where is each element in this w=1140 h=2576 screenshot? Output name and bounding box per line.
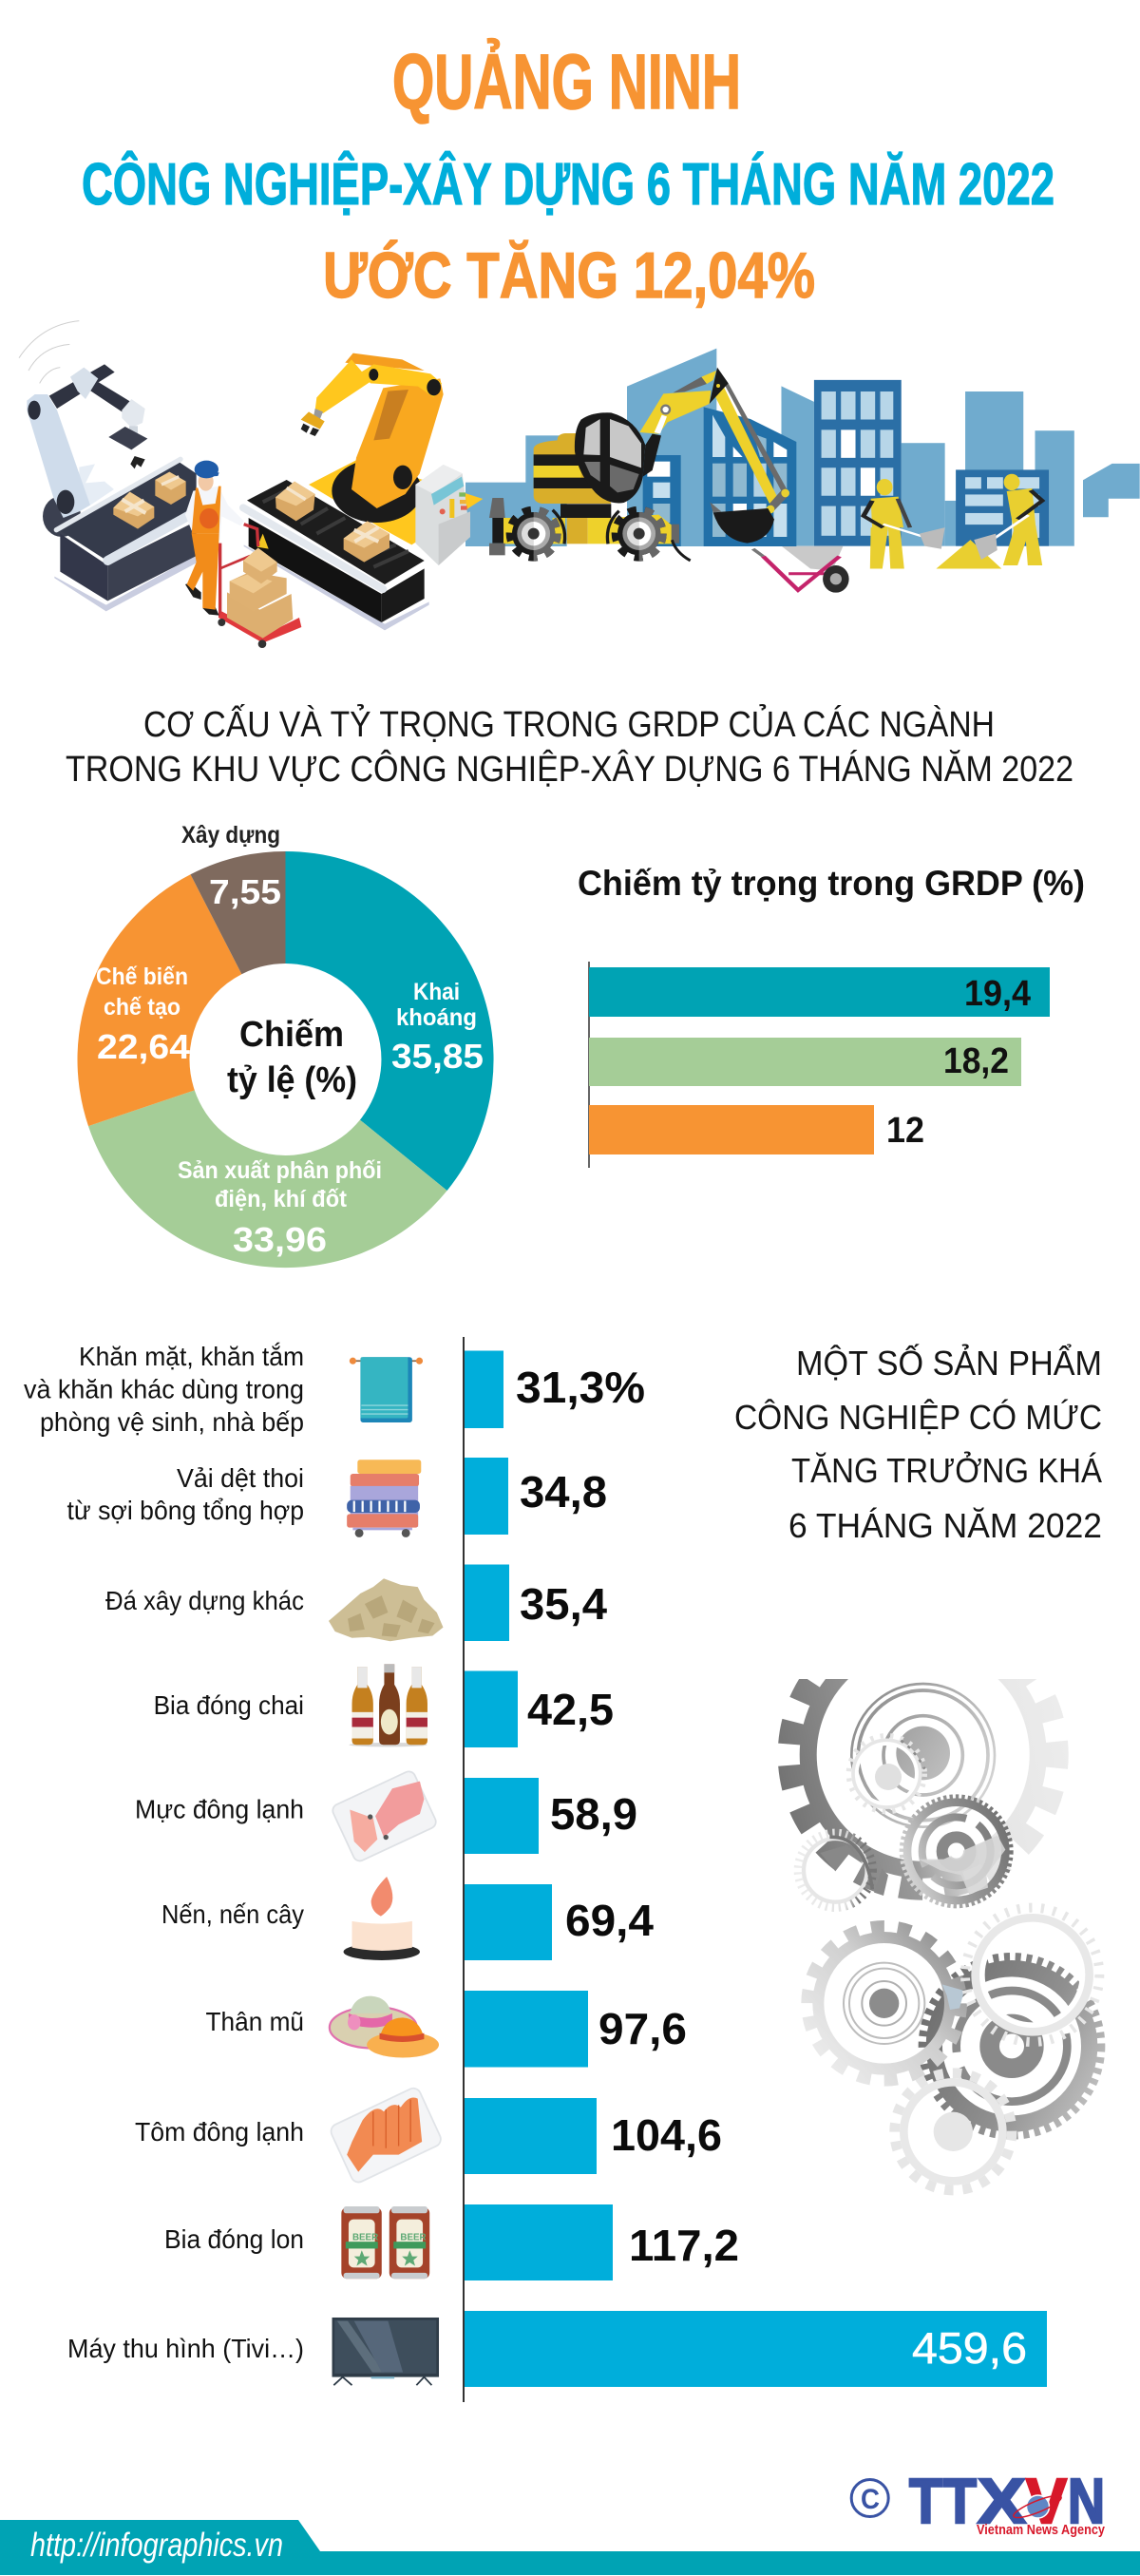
wordmark [909, 2466, 1105, 2537]
label [24, 1342, 304, 1437]
product row: canned beer [164, 2204, 739, 2280]
donut label: mining [396, 979, 477, 1031]
value: 104,6 [611, 2110, 722, 2160]
donut centre label: tỷ lệ (%) [227, 1060, 357, 1100]
donut value: construction: 7,55 [209, 872, 281, 911]
bar [465, 1991, 588, 2068]
donut label: manufacturing [96, 964, 188, 1021]
wordmark: T [909, 2466, 942, 2537]
value: 35,4 [520, 1579, 607, 1629]
icon: beer bottles [349, 1664, 428, 1746]
label: và khăn khác dùng trong [24, 1374, 304, 1404]
product row: hat bodies [205, 1991, 687, 2068]
right-hand city and workers [753, 380, 1140, 593]
medium gear [902, 1798, 1010, 1905]
wheelbarrow [753, 546, 849, 593]
icon: towel [350, 1357, 423, 1422]
section heading: structure and share in GRDP: CƠ CẤU VÀ TỶ TRỌNG TRONG GRDP CỦA CÁC NGÀNH [143, 703, 995, 745]
excavator [489, 368, 789, 561]
value: 97,6 [598, 2004, 687, 2053]
middle city and excavator [466, 349, 796, 561]
panel heading: products with strong growth: 6 THÁNG NĂM 2022 [788, 1506, 1102, 1545]
donut centre label [227, 1015, 357, 1100]
slice: manufacturing 22.64 [77, 874, 241, 1126]
label: Mực đông lạnh [135, 1794, 304, 1824]
title line: growth figure: ƯỚC TĂNG 12,04% [323, 239, 815, 312]
value: 117,2 [629, 2221, 739, 2270]
donut label: mining: Khai [413, 979, 460, 1005]
bar [465, 1778, 539, 1854]
panel heading: products with strong growth: TĂNG TRƯỞNG KHÁ [791, 1450, 1102, 1490]
product row: woven fabric [66, 1458, 607, 1537]
wheel: rear [509, 509, 558, 558]
label [66, 1463, 304, 1525]
label: từ sợi bông tổng hợp [66, 1496, 304, 1525]
middle buildings [466, 349, 796, 546]
bar [465, 1351, 504, 1428]
small gear [798, 1833, 888, 1908]
wordmark: T [943, 2466, 977, 2537]
donut centre label: Chiếm [239, 1015, 344, 1055]
bar chart: share in GRDP [578, 864, 1085, 1168]
icon: beer cans [341, 2206, 429, 2279]
bar [465, 1564, 509, 1641]
bar 18,2 [589, 1038, 1021, 1086]
icon: frozen shrimp tray [329, 2086, 444, 2185]
bar 19,4: 19,4 [964, 974, 1031, 1014]
slice: mining 35.85 [285, 851, 494, 1191]
panel heading: products with strong growth: CÔNG NGHIỆP CÓ MỨC [734, 1398, 1102, 1437]
bar [465, 2098, 597, 2174]
donut label: construction: Xây dựng [181, 822, 280, 849]
factory worker with hand truck [185, 461, 301, 648]
wheel: front [615, 509, 663, 558]
white robot arm [19, 321, 147, 537]
light bottom gear [895, 2073, 1012, 2190]
product row: frozen squid [135, 1769, 637, 1863]
illustration: factory and construction scene [19, 321, 1140, 648]
value: 34,8 [520, 1467, 607, 1517]
big gear [778, 1679, 1068, 1900]
bar [465, 1458, 508, 1535]
title line: Quảng Ninh: QUẢNG NINH [392, 39, 741, 125]
icon: beer cans: BEER [400, 2232, 427, 2242]
copyright mark [851, 2480, 888, 2516]
label: Thân mũ [205, 2007, 304, 2036]
product row: construction stone [105, 1564, 607, 1641]
product row: bottled beer [154, 1664, 614, 1747]
label: Tôm đông lạnh [135, 2117, 304, 2147]
icon: candle [344, 1877, 420, 1960]
value: 58,9 [550, 1789, 637, 1839]
label: Nến, nến cây [162, 1899, 304, 1929]
icon: beer cans: BEER [352, 2232, 378, 2242]
wordmark: N [1068, 2466, 1105, 2537]
section heading: structure and share in GRDP [66, 703, 1074, 790]
axis [463, 1337, 465, 2402]
slice: power and gas 33.96 [88, 1090, 447, 1268]
panel heading: products with strong growth: MỘT SỐ SẢN PHẨM [796, 1343, 1102, 1383]
label: Đá xây dựng khác [105, 1586, 304, 1615]
product row: frozen shrimp [135, 2086, 722, 2185]
bar 19,4 [589, 967, 1050, 1017]
icon: hats [330, 1996, 439, 2058]
product row: towels [24, 1342, 645, 1437]
decoration: gears [789, 1621, 1100, 2190]
title [82, 39, 1054, 312]
light overlay gear [848, 1736, 924, 1812]
label: phòng vệ sinh, nhà bếp [40, 1407, 304, 1437]
yellow robot base [309, 459, 483, 544]
large right gear [923, 1957, 1100, 2135]
donut value: power and gas: 33,96 [233, 1220, 327, 1259]
agency name: Vietnam News Agency [977, 2522, 1106, 2538]
light top-right gear [965, 1908, 1099, 2042]
yellow robot arm [301, 353, 444, 523]
construction workers [864, 474, 1042, 569]
right conveyor [243, 480, 429, 630]
donut label: power and gas: Sản xuất phân phối [178, 1157, 382, 1184]
box [344, 521, 390, 563]
donut label: mining: khoáng [396, 1004, 477, 1031]
globe [1012, 2491, 1063, 2522]
control panel [415, 465, 470, 565]
donut label: manufacturing: chế tạo [104, 994, 180, 1021]
concentric rings [851, 1684, 995, 1827]
panel heading: products with strong growth [734, 1343, 1102, 1545]
bar 12 [589, 1105, 924, 1154]
value: 459,6 [912, 2323, 1027, 2373]
box [155, 472, 186, 505]
copyright mark: C [861, 2484, 880, 2515]
label: Bia đóng lon [164, 2224, 304, 2254]
left conveyor with boxes [54, 459, 198, 611]
wordmark: V [1026, 2466, 1067, 2537]
icon: frozen squid tray [331, 1769, 438, 1863]
slice: construction 7.55 [190, 851, 285, 974]
logo: TTXVN Vietnam News Agency [851, 2466, 1106, 2538]
wordmark: X [978, 2466, 1026, 2537]
box [276, 482, 315, 521]
donut chart: share by sector [77, 822, 494, 1268]
donut label: manufacturing: Chế biến [96, 964, 188, 990]
bar [465, 1670, 518, 1747]
box [113, 492, 154, 529]
bar 12: 12 [886, 1111, 924, 1151]
lower gear cluster [808, 1908, 1100, 2190]
bar [465, 2311, 1047, 2387]
value: 31,3% [516, 1363, 645, 1412]
label: Vải dệt thoi [177, 1463, 304, 1493]
label: Khăn mặt, khăn tắm [79, 1342, 304, 1371]
icon: stone pile [329, 1578, 443, 1641]
bar [465, 2204, 613, 2280]
label: Bia đóng chai [154, 1690, 304, 1720]
city skyline [781, 380, 1140, 546]
chart heading: Chiếm tỷ trọng trong GRDP (%) [578, 864, 1085, 903]
label: Máy thu hình (Tivi…) [67, 2334, 304, 2363]
value: 42,5 [527, 1685, 614, 1734]
bar 18,2: 18,2 [943, 1041, 1009, 1081]
factory floor [19, 321, 483, 648]
product row: televisions [67, 2311, 1047, 2387]
footer url: http://infographics.vn [30, 2527, 283, 2564]
donut label: power and gas: điện, khí đốt [215, 1186, 348, 1212]
icon: fabric rolls on cart [347, 1460, 421, 1537]
donut value: mining: 35,85 [391, 1037, 484, 1076]
donut label: power and gas [178, 1157, 382, 1212]
icon: television [332, 2318, 439, 2385]
upper gear cluster [798, 1684, 1010, 1908]
right conveyor, yellow robot and control panel [243, 353, 483, 630]
bar [465, 1884, 552, 1960]
product row: candles [162, 1877, 654, 1960]
value: 69,4 [565, 1896, 654, 1945]
left gear [808, 1927, 964, 2080]
donut value: manufacturing: 22,64 [97, 1027, 190, 1066]
footer band [0, 2520, 1140, 2575]
